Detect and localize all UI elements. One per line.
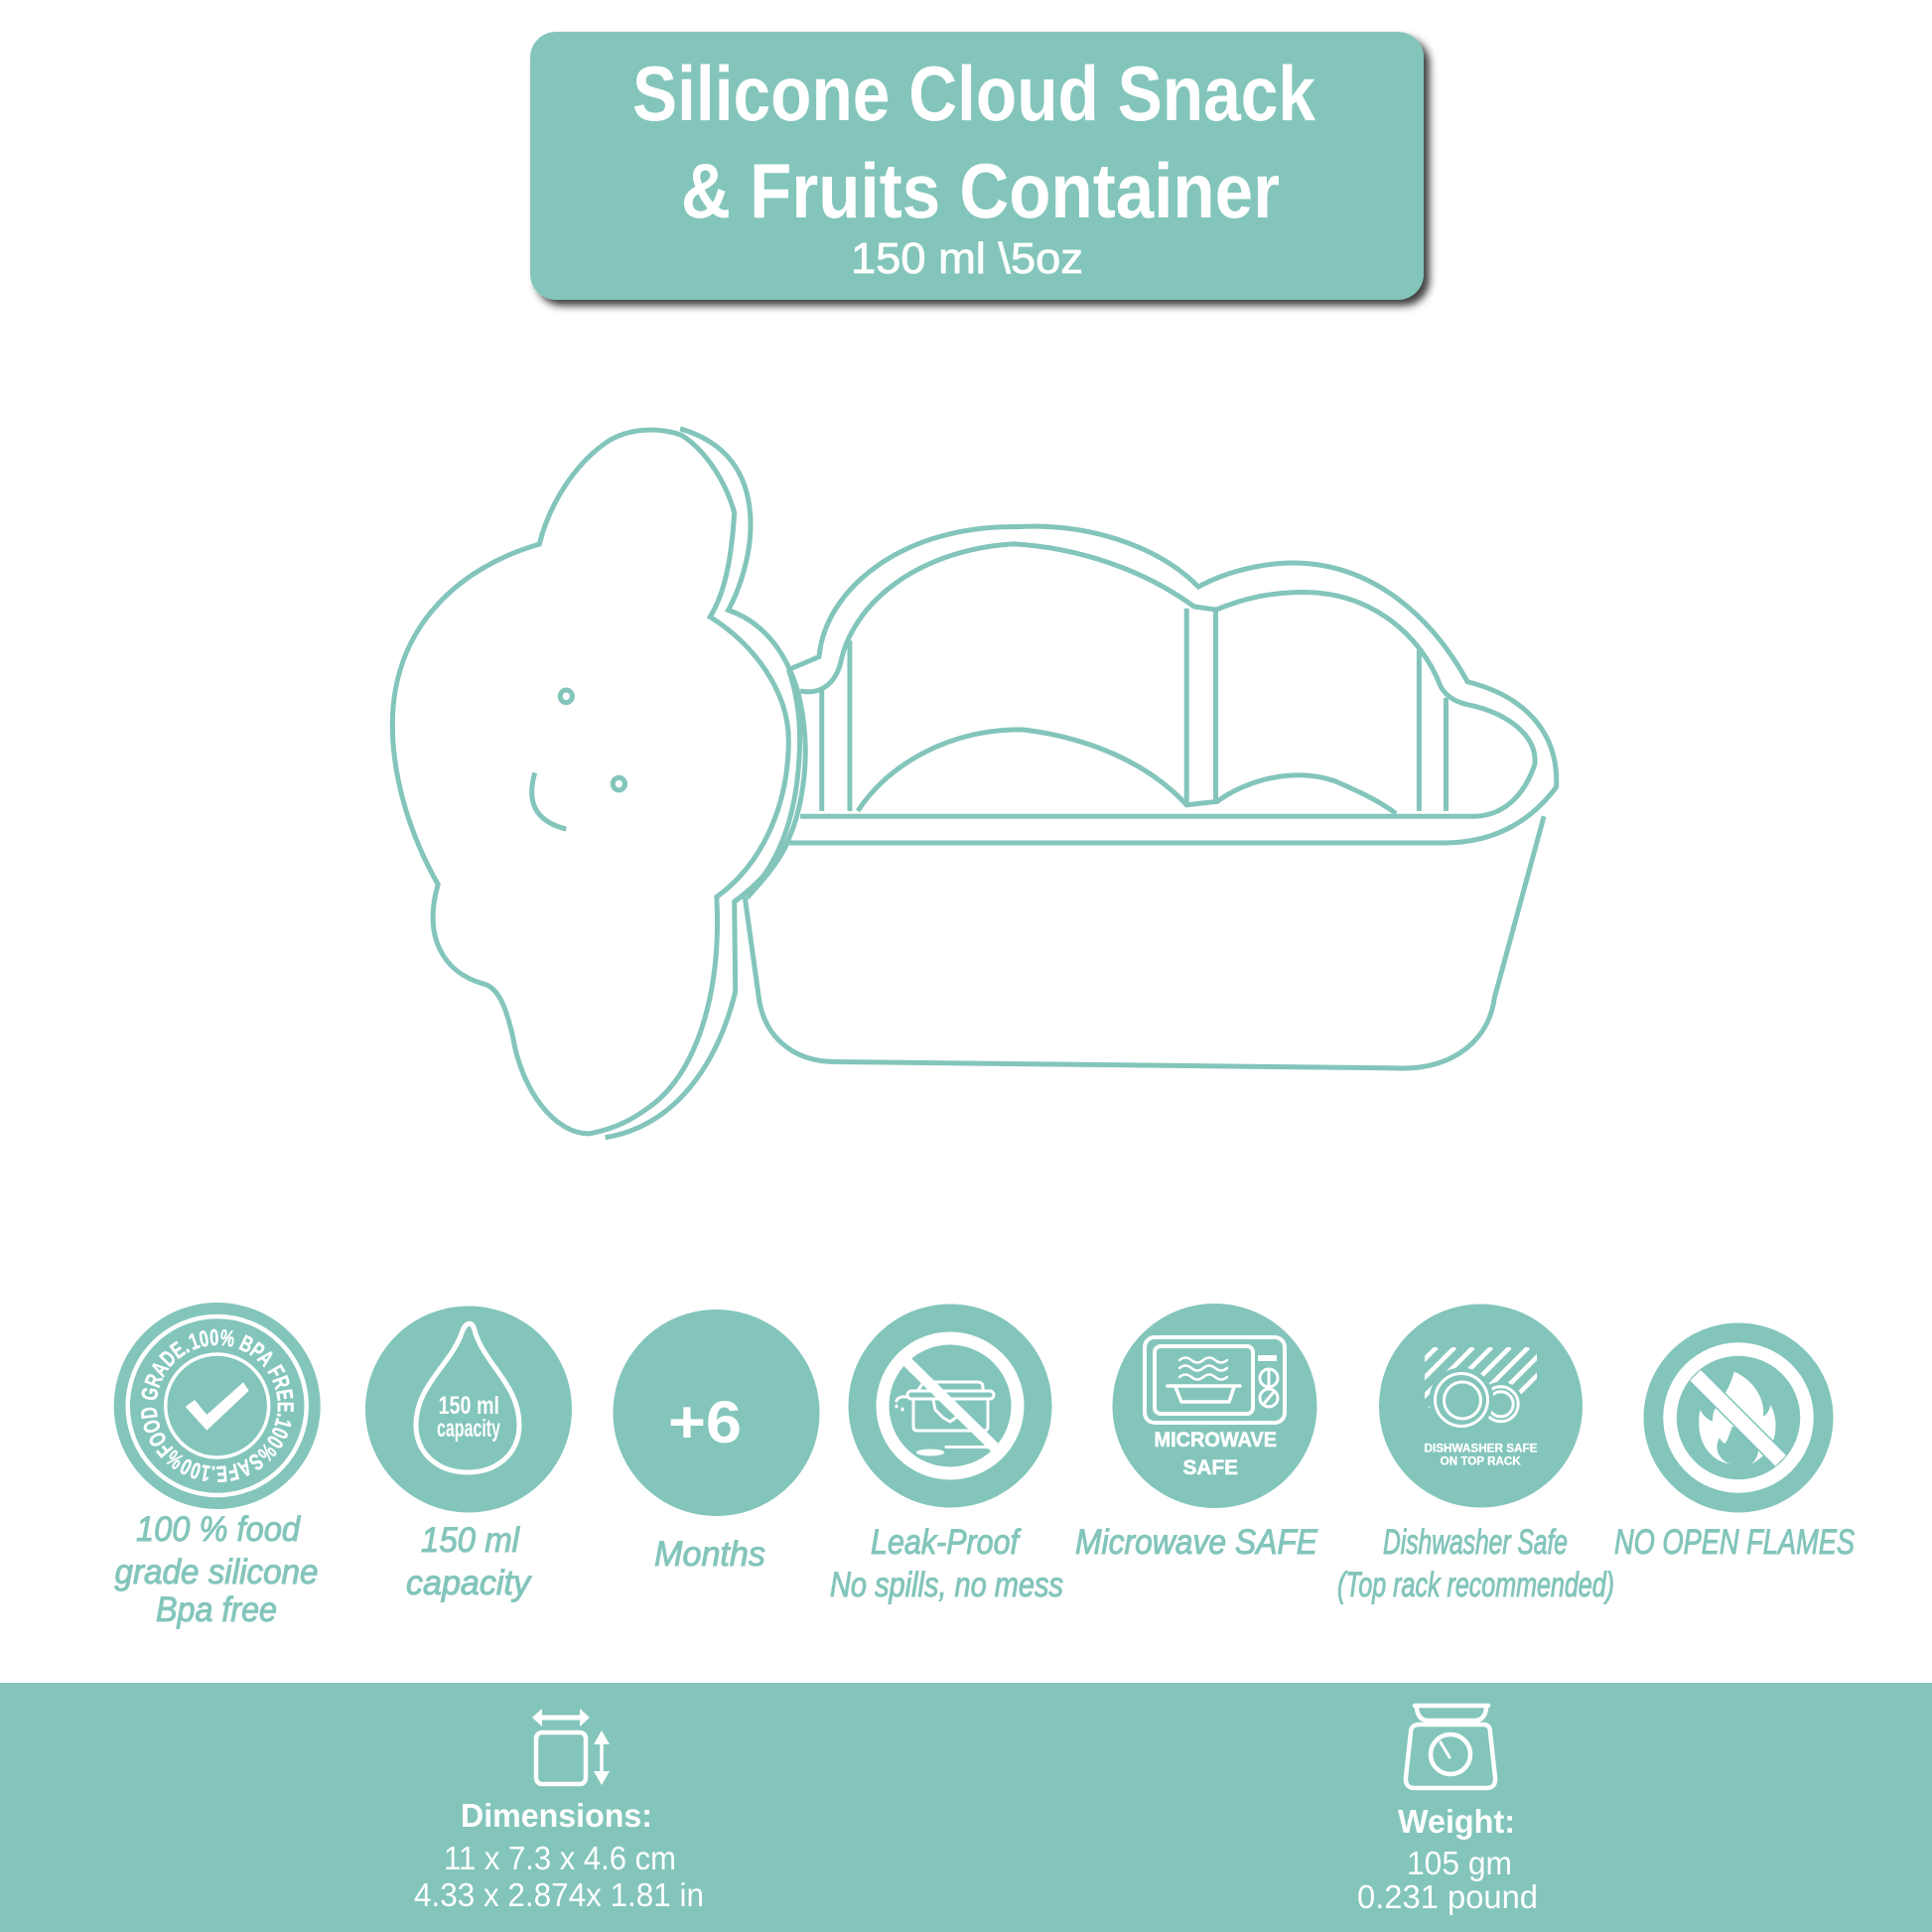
tray inner rim (800, 544, 1535, 816)
label: capacity (406, 1521, 532, 1602)
face: right eye (613, 777, 624, 790)
drop text: capacity (437, 1415, 500, 1443)
badge: food grade (113, 1303, 321, 1509)
label: microwave: Microwave SAFE (1075, 1523, 1318, 1562)
tray floor curve (858, 730, 1396, 814)
badge: no flames (1644, 1322, 1833, 1513)
label: food grade: Bpa free (156, 1590, 277, 1629)
badge: dishwasher (1375, 1305, 1584, 1507)
lid back edge (606, 429, 805, 1138)
age number: +6 (668, 1389, 742, 1455)
slash (1696, 1375, 1781, 1460)
label: capacity: 150 ml (421, 1521, 520, 1560)
label: food grade: 100 % food (136, 1510, 301, 1549)
product line drawing: cloud lid (392, 429, 805, 1138)
microwave text: SAFE (1183, 1456, 1238, 1479)
banner background (530, 32, 1424, 300)
spill puddle (916, 1449, 944, 1455)
drop text (437, 1392, 500, 1443)
icon: drop (416, 1323, 519, 1472)
dimensions text: 11 x 7.3 x 4.6 cm (444, 1840, 676, 1876)
tray inside walls (822, 609, 1446, 811)
label: dishwasher: Dishwasher Safe (1383, 1523, 1568, 1562)
dishwasher text: DISHWASHER SAFE (1424, 1444, 1538, 1455)
drop text: 150 ml (439, 1392, 499, 1420)
label: food grade: grade silicone (115, 1553, 318, 1591)
icon: flame (1699, 1372, 1776, 1464)
label: no flames: NO OPEN FLAMES (1614, 1523, 1855, 1562)
check mark (186, 1382, 249, 1431)
title: Silicone Cloud Snack (632, 50, 1316, 137)
title (632, 50, 1316, 234)
label: capacity: capacity (406, 1564, 532, 1602)
ring text: 100% BPA FREE.100%SAFE.100%FOOD GRADE. (141, 1328, 294, 1483)
face: smile (532, 772, 566, 829)
dimensions text (414, 1797, 704, 1913)
weight text: 0.231 pound (1357, 1878, 1538, 1915)
weight text: Weight: (1398, 1803, 1515, 1840)
dimensions text: 4.33 x 2.874x 1.81 in (414, 1876, 704, 1913)
lid rim edge (735, 669, 800, 901)
capacity subtitle: 150 ml \5oz (851, 234, 1083, 283)
icon: dimensions (532, 1709, 610, 1785)
icon: scale (1406, 1706, 1495, 1788)
label: leak proof: Leak-Proof (871, 1523, 1022, 1562)
dishwasher text (1424, 1444, 1538, 1467)
bottom band (0, 1683, 1932, 1932)
icon: plates (1431, 1369, 1522, 1431)
icon: rack stripes (1425, 1347, 1537, 1408)
icon: microwave (1145, 1337, 1285, 1423)
tray outer rim (789, 526, 1557, 843)
badge: capacity (365, 1307, 572, 1513)
label: leak proof (830, 1523, 1063, 1604)
icon: container with spill (897, 1382, 994, 1448)
lid front outline (392, 430, 788, 1134)
tray body (745, 816, 1544, 1068)
face: left eye (560, 690, 572, 703)
title: & Fruits Container (681, 147, 1280, 234)
microwave text: MICROWAVE (1154, 1429, 1277, 1451)
badge: microwave (1112, 1304, 1316, 1508)
label: food grade (115, 1510, 318, 1629)
weight text: 105 gm (1407, 1845, 1512, 1881)
lid hinge edge (747, 843, 787, 897)
microwave text (1154, 1429, 1277, 1479)
label: leak proof: No spills, no mess (830, 1566, 1063, 1604)
slash (904, 1359, 996, 1449)
badge: age (614, 1310, 820, 1516)
label: dishwasher: (Top rack recommended) (1337, 1566, 1614, 1604)
dimensions text: Dimensions: (461, 1797, 652, 1834)
header banner (530, 32, 1424, 300)
dishwasher text: ON TOP RACK (1441, 1455, 1521, 1467)
label: dishwasher (1337, 1523, 1614, 1604)
badge: leak proof (848, 1305, 1052, 1507)
label: months: Months (654, 1535, 765, 1574)
weight text (1357, 1803, 1538, 1915)
product line drawing: container tray (745, 526, 1557, 1068)
